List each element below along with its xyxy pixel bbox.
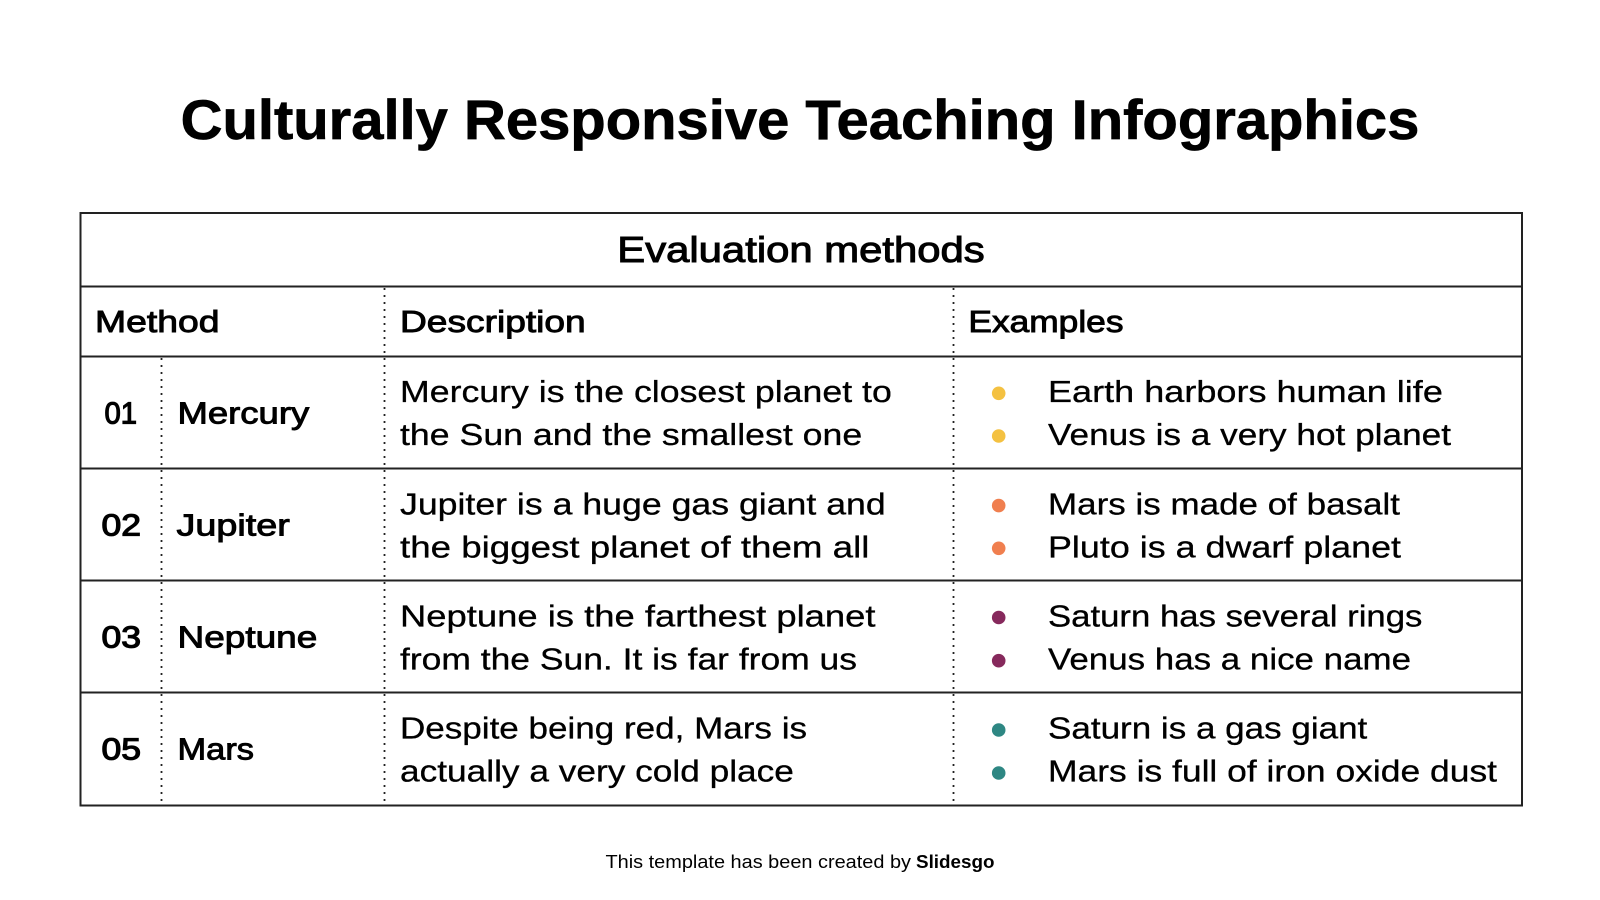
row 01: Mercury: [104, 374, 1451, 452]
column headers: [95, 304, 1124, 339]
description: Neptune: Neptune is the farthest planet: [400, 598, 876, 633]
examples: Mars: [992, 710, 1497, 788]
description: Jupiter: [400, 486, 886, 564]
row 03: Neptune: 03: [102, 619, 141, 654]
examples: Jupiter: [992, 486, 1401, 564]
description: Mars: actually a very cold place: [400, 753, 794, 788]
examples: Mercury: Venus is a very hot planet: [1048, 417, 1451, 452]
examples: Jupiter: Mars is made of basalt: [1048, 486, 1400, 521]
column headers: Examples: [968, 304, 1124, 339]
examples: Mercury: Earth harbors human life: [1048, 374, 1443, 409]
row 01: Mercury: Mercury: [178, 395, 310, 430]
examples: Neptune: Saturn has several rings: [1048, 598, 1422, 633]
row 05: Mars: Mars: [178, 731, 254, 766]
examples: Mars: Mars is full of iron oxide dust: [1048, 753, 1497, 788]
table heading: Evaluation methods: [617, 229, 985, 270]
description: Mercury: the Sun and the smallest one: [400, 417, 862, 452]
row 05: Mars: [102, 710, 1497, 788]
examples: Neptune: [992, 598, 1422, 676]
description: Jupiter: the biggest planet of them all: [400, 529, 869, 564]
description: Mercury: [400, 374, 892, 452]
description: Mercury: Mercury is the closest planet to: [400, 374, 892, 409]
table frame: [80, 213, 1522, 806]
footer credit: This template has been created by: [606, 852, 911, 872]
description: Mars: [400, 710, 807, 788]
description: Mars: Despite being red, Mars is: [400, 710, 807, 745]
row 02: Jupiter: [102, 486, 1401, 564]
examples: Neptune: Venus has a nice name: [1048, 641, 1411, 676]
examples: Mars: Saturn is a gas giant: [1048, 710, 1368, 745]
column headers: Method: [95, 304, 220, 339]
row 02: Jupiter: Jupiter: [176, 507, 290, 542]
panel: evaluation methods table: [80, 213, 1522, 806]
description: Neptune: from the Sun. It is far from us: [400, 641, 857, 676]
row 05: Mars: 05: [102, 731, 141, 766]
row 03: Neptune: [102, 598, 1422, 676]
row 02: Jupiter: 02: [102, 507, 141, 542]
row 03: Neptune: Neptune: [178, 619, 317, 654]
description: Jupiter: Jupiter is a huge gas giant and: [400, 486, 886, 521]
description: Neptune: [400, 598, 876, 676]
examples: Jupiter: Pluto is a dwarf planet: [1048, 529, 1401, 564]
footer credit: Slidesgo: [916, 852, 995, 872]
title: Culturally Responsive Teaching Infographics: [181, 89, 1419, 151]
column headers: Description: [400, 304, 586, 339]
row 01: Mercury: 01: [104, 395, 137, 430]
examples: Mercury: [992, 374, 1451, 452]
